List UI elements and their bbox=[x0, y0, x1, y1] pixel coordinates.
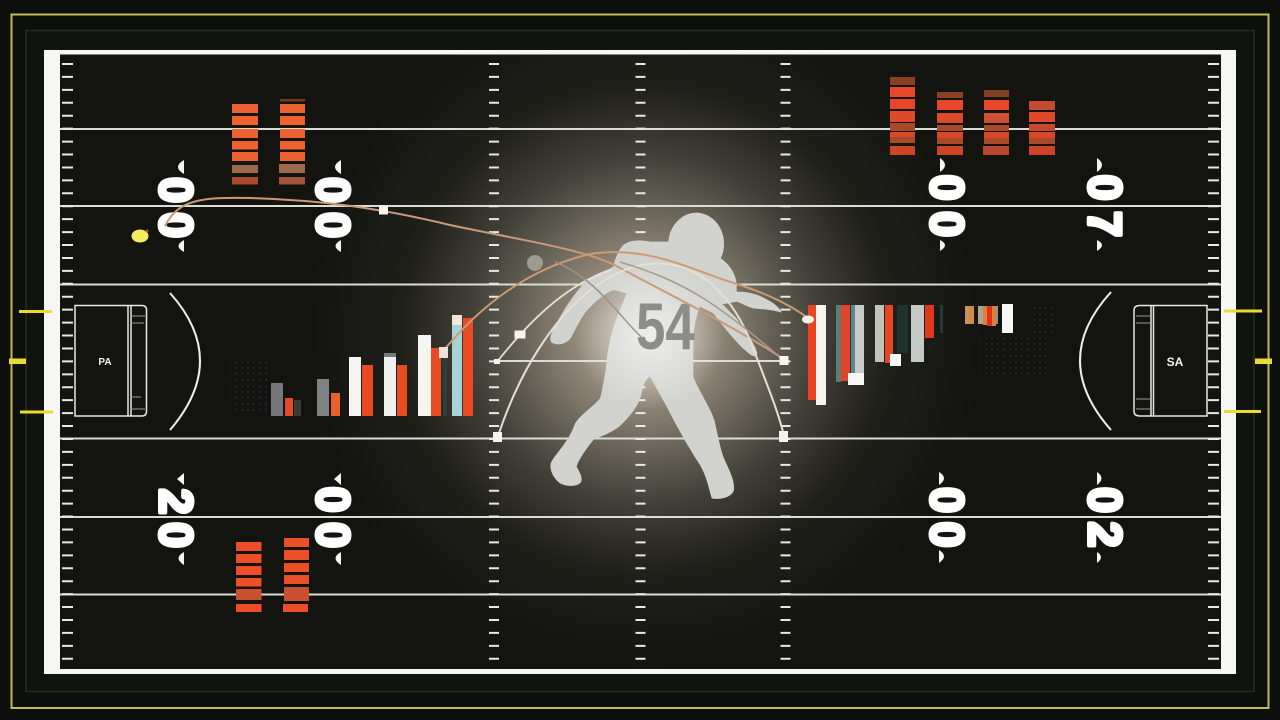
field numbers top row: 0 bbox=[307, 212, 359, 238]
field numbers top row: 0 bbox=[921, 175, 973, 200]
field numbers top row: 0 bbox=[921, 211, 973, 237]
field numbers bottom row: 0 bbox=[307, 522, 359, 548]
end zone box right bbox=[1134, 306, 1207, 416]
stacked bars top left bbox=[232, 99, 305, 184]
field numbers bottom row: 2 bbox=[1079, 522, 1131, 547]
field numbers top row: 0 bbox=[150, 177, 202, 203]
end zone box left bbox=[75, 306, 146, 416]
field numbers bottom row: 0 bbox=[1079, 487, 1131, 513]
goal posts left bbox=[9, 310, 53, 414]
bar chart right bbox=[808, 304, 1013, 405]
player highlight bbox=[575, 260, 725, 410]
halftone dots bbox=[230, 303, 1055, 415]
stacked bars top right bbox=[890, 77, 1055, 155]
arc right bbox=[1080, 292, 1111, 430]
bar chart left bbox=[271, 315, 473, 416]
field numbers bottom row: 0 bbox=[921, 487, 973, 513]
end zone box left: PA bbox=[98, 357, 112, 368]
arc left bbox=[170, 293, 200, 430]
stacked bars bottom left bbox=[236, 538, 309, 612]
field numbers top row bbox=[150, 175, 1131, 238]
field number arrows bbox=[177, 158, 1102, 565]
player silhouette bbox=[550, 213, 782, 499]
ball marker bbox=[132, 230, 148, 242]
field numbers top row: 0 bbox=[150, 212, 202, 238]
pass route curves bbox=[165, 198, 808, 436]
field numbers top row: 0 bbox=[307, 177, 359, 203]
hash marks bbox=[68, 63, 1214, 664]
field numbers bottom row: 0 bbox=[150, 522, 202, 548]
field numbers bottom row: 0 bbox=[921, 522, 973, 547]
field numbers top row: 7 bbox=[1079, 211, 1131, 237]
field numbers bottom row bbox=[150, 487, 1131, 548]
field numbers bottom row: 0 bbox=[307, 487, 359, 512]
end zone box right: SA bbox=[1167, 355, 1184, 369]
jersey number: 54 bbox=[636, 290, 695, 363]
route nodes bbox=[379, 206, 814, 442]
center glow bbox=[60, 54, 1221, 669]
goal posts right bbox=[1224, 310, 1272, 413]
yard lines bbox=[60, 129, 1221, 594]
field numbers bottom row: 2 bbox=[150, 489, 202, 514]
field numbers top row: 0 bbox=[1079, 175, 1131, 200]
